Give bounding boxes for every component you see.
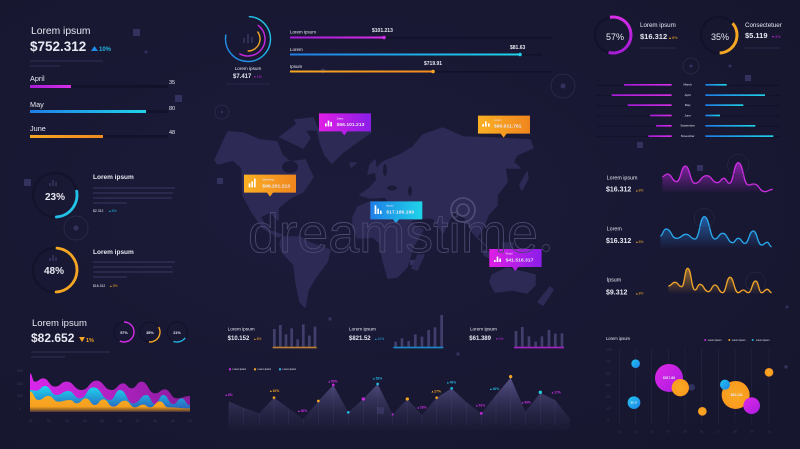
row: september: September	[680, 124, 695, 128]
axis labels: 600	[17, 382, 23, 386]
sparkline: magenta: $16.312	[606, 187, 631, 194]
panel: radial progress: Lorem ipsum	[235, 66, 261, 71]
sparkline: orange	[606, 268, 772, 296]
axis labels: 06	[118, 419, 122, 423]
bar: lorem	[290, 45, 542, 56]
panel: bar card 10.152: Lorem ipsum	[228, 326, 255, 331]
stats: $5.119	[745, 31, 768, 40]
axis labels: 100	[606, 406, 611, 410]
panel: stacked area summary	[17, 318, 192, 423]
panel: 57% donut card	[592, 14, 678, 56]
may bar: 80	[169, 106, 175, 112]
panel: bar card 61.389: ▾ 1%	[496, 337, 503, 341]
data points	[273, 375, 542, 415]
sparkline: blue: $16.312	[606, 238, 631, 245]
description: ▴ 3%	[110, 284, 118, 288]
bar: ipsum: Ipsum	[290, 64, 303, 69]
stats: ▾ 4%	[772, 35, 781, 39]
radial chart	[224, 15, 272, 63]
panel: diverging bars	[597, 83, 780, 138]
tag: lorem: Lorem	[494, 118, 502, 122]
bubbles: $6.17	[631, 401, 638, 405]
panel: horizontal progress bars	[290, 28, 552, 73]
change indicator: 1%	[86, 338, 94, 344]
inland seas	[282, 161, 412, 196]
tag: lorem: $90.911.781	[494, 124, 522, 130]
axis labels: 03	[65, 419, 69, 423]
tag: retail	[489, 249, 542, 271]
axis labels: 05	[683, 430, 687, 434]
legend	[229, 368, 296, 371]
sparkline: blue: Lorem	[607, 227, 622, 233]
description: Lorem ipsum	[93, 249, 134, 256]
panel: bar card 10.152: ▴ 8%	[254, 337, 261, 341]
panel: bar card 821.52: $821.52	[349, 336, 371, 342]
axis labels: 08	[733, 430, 737, 434]
sparkline: magenta: ▴ 8%	[636, 189, 643, 193]
donut chart	[31, 246, 79, 294]
column chart	[516, 327, 562, 347]
description: $16.312	[93, 284, 105, 288]
mini donut 21%: 21%	[173, 331, 181, 335]
panel: 35% donut card: 35%	[711, 32, 729, 42]
tag: marketing: Marketing	[262, 178, 275, 182]
percentage labels: ▴ 40%	[489, 387, 499, 391]
watermark: dreamstime	[248, 202, 538, 264]
description	[93, 249, 175, 288]
mini donut 35%	[136, 318, 164, 346]
change indicator	[79, 337, 94, 344]
panel: radial progress: ▾ 1%	[254, 75, 263, 79]
axis labels: 09	[171, 419, 175, 423]
panel: bar card 61.389: $61.389	[469, 336, 492, 342]
panel: 35% donut card	[694, 10, 782, 60]
axis labels: 01	[29, 419, 33, 423]
panel: bar card 10.152	[228, 324, 317, 348]
row: november: November	[681, 134, 695, 138]
sparkline: orange: $9.312	[606, 289, 627, 296]
panel: bar card 821.52: ▴ 10%	[375, 337, 384, 341]
mini donut 21%	[163, 318, 191, 346]
stats: ▴ 8%	[669, 36, 678, 40]
percentage labels: ▴ 53%	[372, 377, 382, 381]
panel: bar card 821.52	[349, 315, 443, 348]
axis labels: 07	[136, 419, 140, 423]
axis labels: 07	[717, 430, 720, 434]
heading: Lorem ipsum	[31, 26, 91, 37]
change indicator: 10%	[99, 47, 112, 53]
value tags	[244, 113, 542, 271]
axis labels: 400	[17, 394, 23, 398]
axis labels: 10	[188, 419, 192, 423]
june bar: 48	[169, 130, 175, 136]
row: may: May	[685, 103, 691, 107]
axis labels: 750	[606, 360, 611, 364]
stats	[745, 22, 782, 48]
panel: 23% donut: 23%	[45, 192, 65, 203]
bar: ipsum	[290, 61, 552, 73]
percentage labels: ▴ 40%	[297, 409, 307, 413]
column chart	[396, 315, 442, 347]
sparkline: magenta	[606, 154, 773, 194]
panel: bar card 10.152: $10.152	[228, 336, 250, 342]
tag: marketing	[244, 175, 296, 197]
axis labels: 02	[47, 419, 51, 423]
description: $2.312	[93, 209, 103, 213]
panel: sparklines	[606, 154, 773, 296]
tag: marketing: $96.201.213	[262, 183, 290, 189]
bar: lorem: $81.63	[510, 45, 526, 51]
legend: Lorem ipsum	[258, 368, 271, 371]
legend: Lorem ipsum	[283, 368, 296, 371]
donut chart	[30, 170, 80, 220]
percentage labels: ▴ 27%	[431, 390, 441, 394]
sparkline: blue: ▴ 8%	[636, 240, 643, 244]
panel: world map with value tags	[215, 113, 553, 307]
heading: Lorem ipsum	[32, 318, 87, 329]
column chart	[274, 324, 315, 347]
tag: retail: Retail	[506, 252, 513, 256]
area	[229, 378, 570, 430]
percentage labels: ▴ 8%	[224, 393, 233, 397]
axis labels: 04	[667, 430, 670, 434]
description	[93, 174, 175, 213]
change indicator	[91, 46, 112, 53]
panel: 57% donut card: 57%	[606, 32, 624, 42]
june bar	[30, 124, 175, 138]
percentage labels: ▴ 50%	[327, 380, 338, 384]
percentage labels: ▴ 49%	[446, 381, 456, 385]
tag: sales: Sales	[337, 116, 344, 120]
heading: Lorem ipsum	[606, 336, 631, 341]
world map landmasses	[215, 118, 553, 307]
panel: 48% donut	[31, 246, 175, 294]
guide lines	[229, 378, 555, 425]
panel: peak area chart	[224, 368, 570, 430]
total value: $752.312	[30, 39, 86, 54]
axis labels: 06	[700, 430, 704, 434]
axis labels: 0	[607, 418, 609, 422]
legend: Lorem ipsum	[756, 339, 769, 342]
axis labels: 05	[100, 419, 104, 423]
mini donut 57%	[114, 322, 134, 342]
bar: lorem ipsum: Lorem ipsum	[290, 30, 316, 34]
tag: ipsum: $17.186.199	[386, 209, 414, 215]
may bar	[30, 100, 175, 113]
legend: Lorem ipsum	[732, 339, 746, 342]
percentage labels: ▴ 10%	[269, 389, 279, 393]
stats	[640, 22, 678, 48]
panel: bar card 821.52: Lorem ipsum	[349, 326, 376, 331]
axis labels: 800	[17, 369, 23, 373]
april bar: April	[30, 74, 45, 83]
row: june: June	[684, 113, 691, 117]
tag: retail: $41.516.317	[506, 258, 534, 264]
legend: Lorem ipsum	[233, 368, 246, 371]
sparkline: orange: ▴ 8%	[636, 291, 643, 295]
row: march: March	[684, 83, 692, 87]
percentage labels: ▴ 33%	[416, 406, 427, 410]
value: $82.652	[31, 331, 75, 345]
tag: ipsum	[370, 201, 422, 223]
bar: ipsum: $719.91	[424, 61, 442, 67]
april bar: 35	[169, 80, 175, 86]
axis labels	[606, 347, 771, 434]
legend	[704, 339, 769, 342]
stats: Lorem ipsum	[640, 22, 676, 29]
axis labels: 01	[618, 430, 621, 434]
mini donut 57%: 57%	[120, 331, 128, 335]
axis labels: 250	[606, 383, 611, 387]
axis labels: 0	[19, 407, 21, 411]
panel: radial progress	[224, 15, 272, 84]
axis labels: 02	[634, 430, 638, 434]
panel: headline with month bars	[30, 26, 175, 138]
axis labels: 1000	[606, 347, 613, 351]
bubbles	[628, 359, 773, 416]
bar: lorem ipsum	[290, 28, 552, 39]
row: april: April	[685, 93, 691, 97]
percentage labels: ▴ 51%	[475, 403, 485, 407]
tag: ipsum: Ipsum	[386, 204, 394, 208]
panel: bar card 61.389: Lorem ipsum	[470, 326, 497, 331]
may bar: May	[30, 100, 44, 109]
axis labels: 500	[606, 371, 611, 375]
axis labels: 200	[606, 395, 611, 399]
axis labels: 03	[650, 430, 654, 434]
panel: 23% donut	[30, 170, 175, 220]
panel: bar card 61.389	[469, 326, 564, 348]
june bar: June	[30, 124, 46, 133]
panel: bubble chart	[606, 336, 773, 434]
sparkline: orange: Ipsum	[607, 278, 622, 284]
axis labels: 09	[750, 430, 754, 434]
legend: Lorem ipsum	[708, 339, 722, 342]
axis labels	[17, 369, 192, 423]
percentage labels: ▴ 17%	[551, 390, 561, 394]
description: Lorem ipsum	[93, 174, 134, 181]
stacked area chart	[30, 373, 190, 412]
tag: sales	[319, 113, 371, 135]
sparkline: blue	[606, 208, 772, 248]
bar: lorem: Lorem	[290, 47, 303, 52]
tag: lorem	[478, 116, 530, 138]
april bar	[30, 74, 175, 88]
donut chart	[592, 14, 634, 56]
axis labels: 08	[153, 419, 157, 423]
stats: Consectetuer	[745, 22, 782, 29]
percentage labels: ▴ 40%	[521, 400, 531, 404]
tag: sales: $56.101.213	[337, 122, 365, 128]
bubbles: $517.86	[663, 376, 675, 380]
donut chart	[694, 10, 744, 60]
bar: lorem ipsum: $101.213	[372, 28, 393, 34]
bubbles: $81.141	[731, 393, 743, 397]
mini donut 35%: 35%	[146, 331, 154, 335]
sparkline: magenta: Lorem ipsum	[607, 175, 638, 181]
panel: radial progress: $7.417	[233, 74, 252, 80]
percentage labels	[224, 377, 561, 413]
axis labels: 10	[767, 430, 771, 434]
axis labels: 04	[83, 419, 87, 423]
panel: 48% donut: 48%	[44, 266, 64, 277]
description: ▴ 6%	[109, 209, 117, 213]
stats: $16.312	[640, 32, 667, 41]
